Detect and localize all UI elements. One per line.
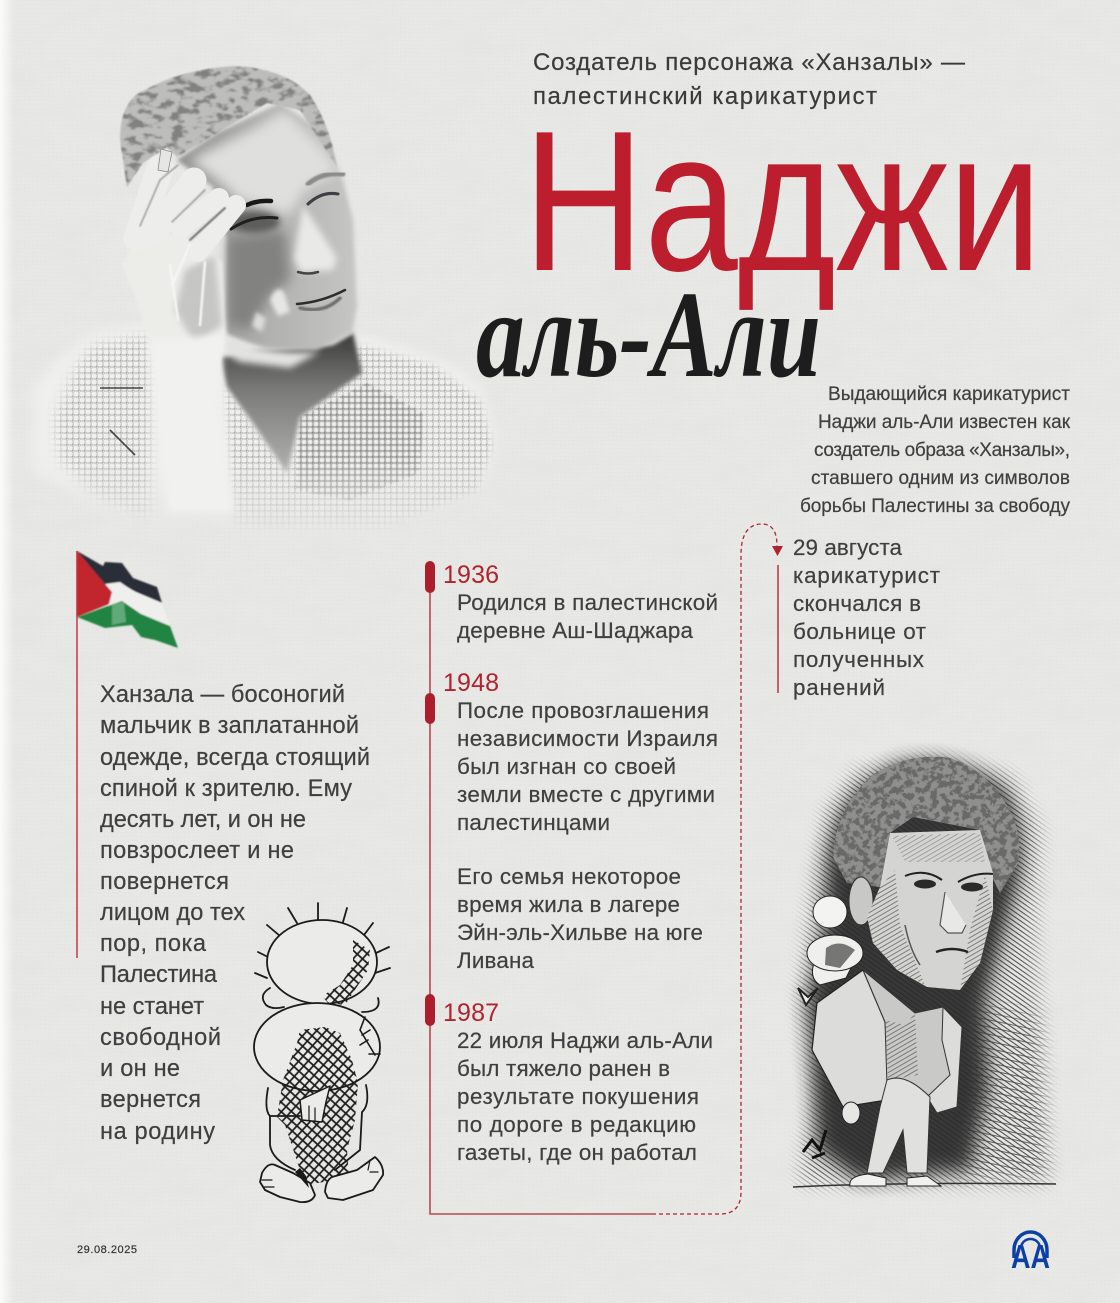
1987 event text: газеты, где он работал [457,1140,697,1165]
1936 event text: Родился в палестинской [457,590,718,615]
icon: Palestinian flag on pole [77,551,178,958]
intro text: борьбы Палестины за свободу [800,496,1070,517]
shirt and waistcoat [863,970,962,1097]
year 1948: 1948 [443,669,499,697]
caricature of Naji al-Ali with Hanzala on shoulder [787,744,1062,1198]
1987 event text: результате покушения [457,1084,699,1109]
finger gaps [140,165,225,240]
Hanzala description text: не станет [100,994,204,1020]
1987 event text [457,1028,713,1165]
arrowhead [772,546,783,556]
1948 event text: земли вместе с другими [457,782,715,807]
face shading [867,870,993,990]
Hanzala description text: спиной к зрителю. Ему [100,776,352,802]
Hanzala description text: мальчик в заплатанной [100,713,359,739]
1948 family text: Ливана [457,948,535,973]
Hanzala description text: на родину [100,1119,215,1145]
1948 family text: время жила в лагере [457,892,680,917]
29 August text: 29 августа [793,535,903,560]
jacket left [812,970,888,1107]
intro text: создатель образа «Ханзалы», [814,440,1070,461]
face [867,830,993,990]
subtitle: Создатель персонажа «Ханзалы» — [533,49,965,76]
eyes and mouth [905,873,993,965]
eyes and brows [228,174,345,310]
1948 event text [457,698,718,835]
hair [120,66,337,187]
1948 family text [457,864,703,973]
portrait photo of Naji al-Ali [0,66,520,540]
Hanzala description text: свободной [100,1025,221,1051]
1987 event text: по дороге в редакцию [457,1112,696,1137]
fingers [137,168,236,252]
cigarette [158,149,172,172]
Hanzala description text: вернется [100,1087,201,1113]
Hanzala description text: повернется [100,869,229,895]
lower right sparse hatching [952,994,1058,1190]
neck [220,333,362,473]
Hanzala description text: пор, пока [100,931,207,957]
year marker [425,693,435,724]
1936 event text [457,590,718,643]
title: аль-Али script: аль-Али [476,266,821,403]
intro text [800,384,1071,517]
date: 29.08.2025 [77,1244,137,1256]
year 1987: 1987 [443,999,499,1027]
1948 family text: Эйн-эль-Хильве на юге [457,920,703,945]
jacket right [927,1007,962,1113]
1936 event text: деревне Аш-Шаджара [457,618,694,643]
subtitle [533,49,965,110]
29 August text: скончался в [793,591,921,616]
year 1936: 1936 [443,561,499,589]
1987 event text: был тяжело ранен в [457,1056,670,1081]
1948 event text: был изгнан со своей [457,754,676,779]
Hanzala description text: повзрослеет и не [100,838,294,864]
face [177,103,357,350]
forearm [148,335,234,512]
Hanzala description text [100,682,370,1145]
29 August text: ранений [793,675,885,700]
trousers [867,1078,930,1173]
intro text: ставшего одним из символов [811,468,1070,489]
under-eye and cheek shadow [228,230,290,330]
29 August text: полученных [793,647,924,672]
ground line [793,1183,1056,1187]
signature [803,1130,826,1158]
vertical rule [777,565,779,693]
shirt [36,328,495,528]
29 August text: больнице от [793,619,926,644]
shoes [850,1174,941,1186]
29 August text [793,535,940,700]
Hanzala description text: и он не [100,1056,180,1082]
Hanzala description text: лицом до тех [100,900,245,926]
subtitle: палестинский карикатурист [533,83,877,110]
forehead shading [892,833,985,862]
intro text: Наджи аль-Али известен как [818,412,1071,433]
year marker [425,994,435,1026]
1948 family text: Его семья некоторое [457,864,681,889]
cheek highlights [270,289,290,316]
1948 event text: независимости Израиля [457,726,718,751]
forehead highlight [190,110,338,215]
Hanzala cartoon figure [254,903,390,1202]
Hanzala description text: Ханзала — босоногий [100,682,345,708]
Hanzala description text: Палестина [100,962,218,988]
logo: Anadolu Agency: AA [1011,1238,1050,1275]
timeline line with year markers [425,524,783,1214]
1987 event text: 22 июля Наджи аль-Али [457,1028,713,1053]
intro text: Выдающийся карикатурист [828,384,1070,405]
nose [294,205,337,272]
hand [122,165,236,420]
year marker [425,561,435,593]
1948 event text: палестинцами [457,810,610,835]
ear [849,877,873,925]
1948 event text: После провозглашения [457,698,709,723]
hair [833,757,1019,893]
Hanzala description text: одежде, всегда стоящий [100,745,370,771]
dark halo core [808,761,1021,1180]
small Hanzala on shoulder [798,896,863,1005]
hand [842,1102,860,1124]
outer hatching [787,746,1060,1198]
Hanzala description text: десять лет, и он не [100,807,306,833]
29 August text: карикатурист [793,563,940,588]
